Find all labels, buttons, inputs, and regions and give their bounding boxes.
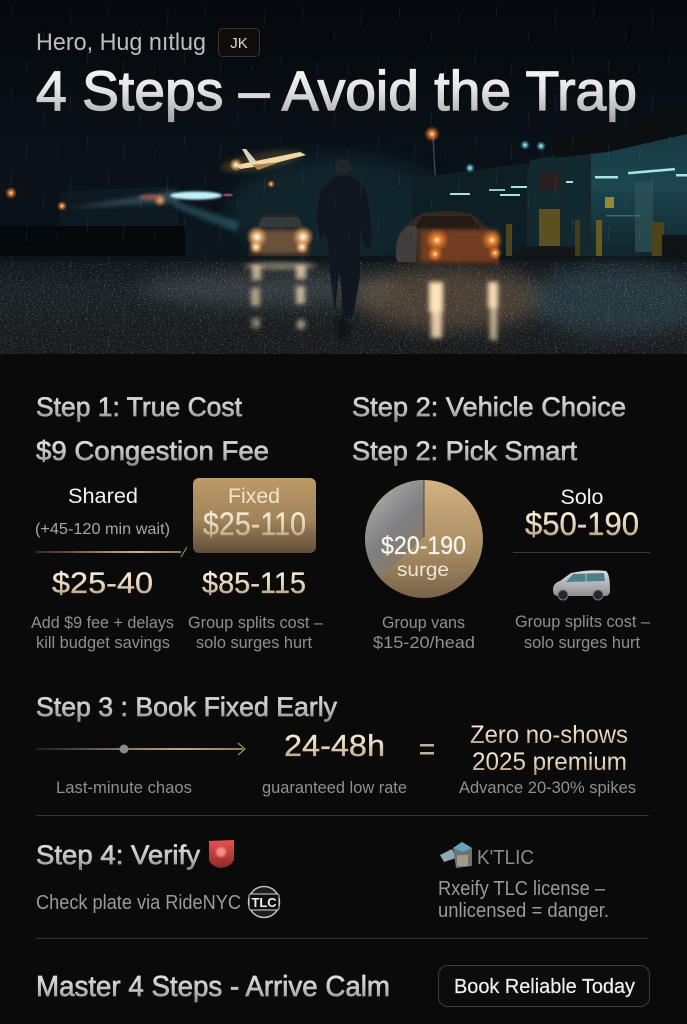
panel: step 4 verify xyxy=(36,840,609,922)
guaranteed caption: guaranteed low rate xyxy=(262,779,407,797)
headlight reflections xyxy=(244,262,498,340)
shared caption: Add $9 fee + delays xyxy=(31,613,174,632)
main title: 4 Steps – Avoid the Trap xyxy=(36,59,637,122)
solo caption: Group splits cost – xyxy=(515,612,651,631)
JK badge: JK xyxy=(230,35,248,52)
hero caption: Hero, Hug nıtlug xyxy=(36,29,206,56)
left car with headlights xyxy=(246,213,314,256)
divider line xyxy=(513,552,650,553)
call to action button xyxy=(438,966,650,1006)
left beam flare xyxy=(70,190,240,232)
panel: step 3 book fixed early xyxy=(36,692,636,797)
call to action button: Book Reliable Today xyxy=(454,976,635,998)
zero no-shows callout xyxy=(470,721,628,776)
icon: van xyxy=(553,570,610,600)
pie chart xyxy=(365,480,483,598)
congestion fee heading: $9 Congestion Fee xyxy=(36,436,269,466)
license warning text: Rxeify TLC license – xyxy=(438,878,606,900)
shared caption: kill budget savings xyxy=(36,633,170,652)
fixed caption: Group splits cost – xyxy=(188,613,324,632)
icon: TLC badge xyxy=(248,886,280,918)
advance caption: Advance 20-30% spikes xyxy=(459,779,636,797)
24-48h figure: 24-48h xyxy=(284,728,385,763)
group vans caption: Group vans xyxy=(382,613,465,632)
wet road xyxy=(0,256,687,354)
check plate text: Check plate via RideNYC xyxy=(36,892,241,914)
fixed price: $85-115 xyxy=(202,567,306,600)
solo caption xyxy=(515,612,651,652)
icon: red shield xyxy=(209,840,234,868)
right car with headlights xyxy=(396,211,503,268)
fixed highlight card: $25-110 xyxy=(203,506,306,542)
icon: license box xyxy=(440,842,472,868)
group vans caption xyxy=(373,613,475,652)
fixed highlight card xyxy=(193,478,316,553)
walking person silhouette xyxy=(316,159,372,340)
rain xyxy=(0,0,687,354)
solo label: Solo xyxy=(560,486,604,509)
terminal building on the right xyxy=(412,105,687,277)
plane xyxy=(219,145,306,188)
last-minute caption: Last-minute chaos xyxy=(56,779,192,797)
step 2 heading: Step 2: Vehicle Choice xyxy=(352,392,626,422)
shared wait note: (+45-120 min wait) xyxy=(35,521,170,538)
pie chart: $20-190 xyxy=(381,532,466,560)
panel: step 2 vehicle choice xyxy=(352,392,651,652)
license warning text: unlicensed = danger. xyxy=(438,900,609,922)
left terminal silhouette xyxy=(0,186,185,258)
footer closing line: Master 4 Steps - Arrive Calm xyxy=(36,971,390,1003)
equals sign xyxy=(420,744,434,754)
pie chart: surge xyxy=(397,560,449,581)
KTLIC label: K'TLIC xyxy=(477,847,534,869)
arrow line to fixed card xyxy=(35,547,187,557)
fixed caption xyxy=(188,613,324,652)
panel: step 1 true cost xyxy=(31,392,324,652)
timeline arrow xyxy=(36,743,245,755)
shared caption xyxy=(31,613,174,652)
JK badge xyxy=(218,28,260,56)
fixed highlight card: Fixed xyxy=(228,485,280,508)
step 1 heading: Step 1: True Cost xyxy=(36,392,242,422)
shared label: Shared xyxy=(68,485,138,508)
street lamp xyxy=(424,126,440,215)
shared price: $25-40 xyxy=(52,567,153,600)
hero photo: rainy airport road at night xyxy=(0,0,687,354)
solo price: $50-190 xyxy=(525,506,639,542)
group vans caption: $15-20/head xyxy=(373,633,475,652)
fixed caption: solo surges hurt xyxy=(196,633,312,652)
license warning text xyxy=(438,878,609,922)
icon: TLC badge: TLC xyxy=(252,895,277,910)
step 4 heading: Step 4: Verify xyxy=(36,840,201,870)
pick smart heading: Step 2: Pick Smart xyxy=(352,436,577,466)
solo caption: solo surges hurt xyxy=(524,633,640,652)
zero no-shows callout: 2025 premium xyxy=(472,748,627,776)
step 3 heading: Step 3 : Book Fixed Early xyxy=(36,692,337,722)
zero no-shows callout: Zero no-shows xyxy=(470,721,628,749)
